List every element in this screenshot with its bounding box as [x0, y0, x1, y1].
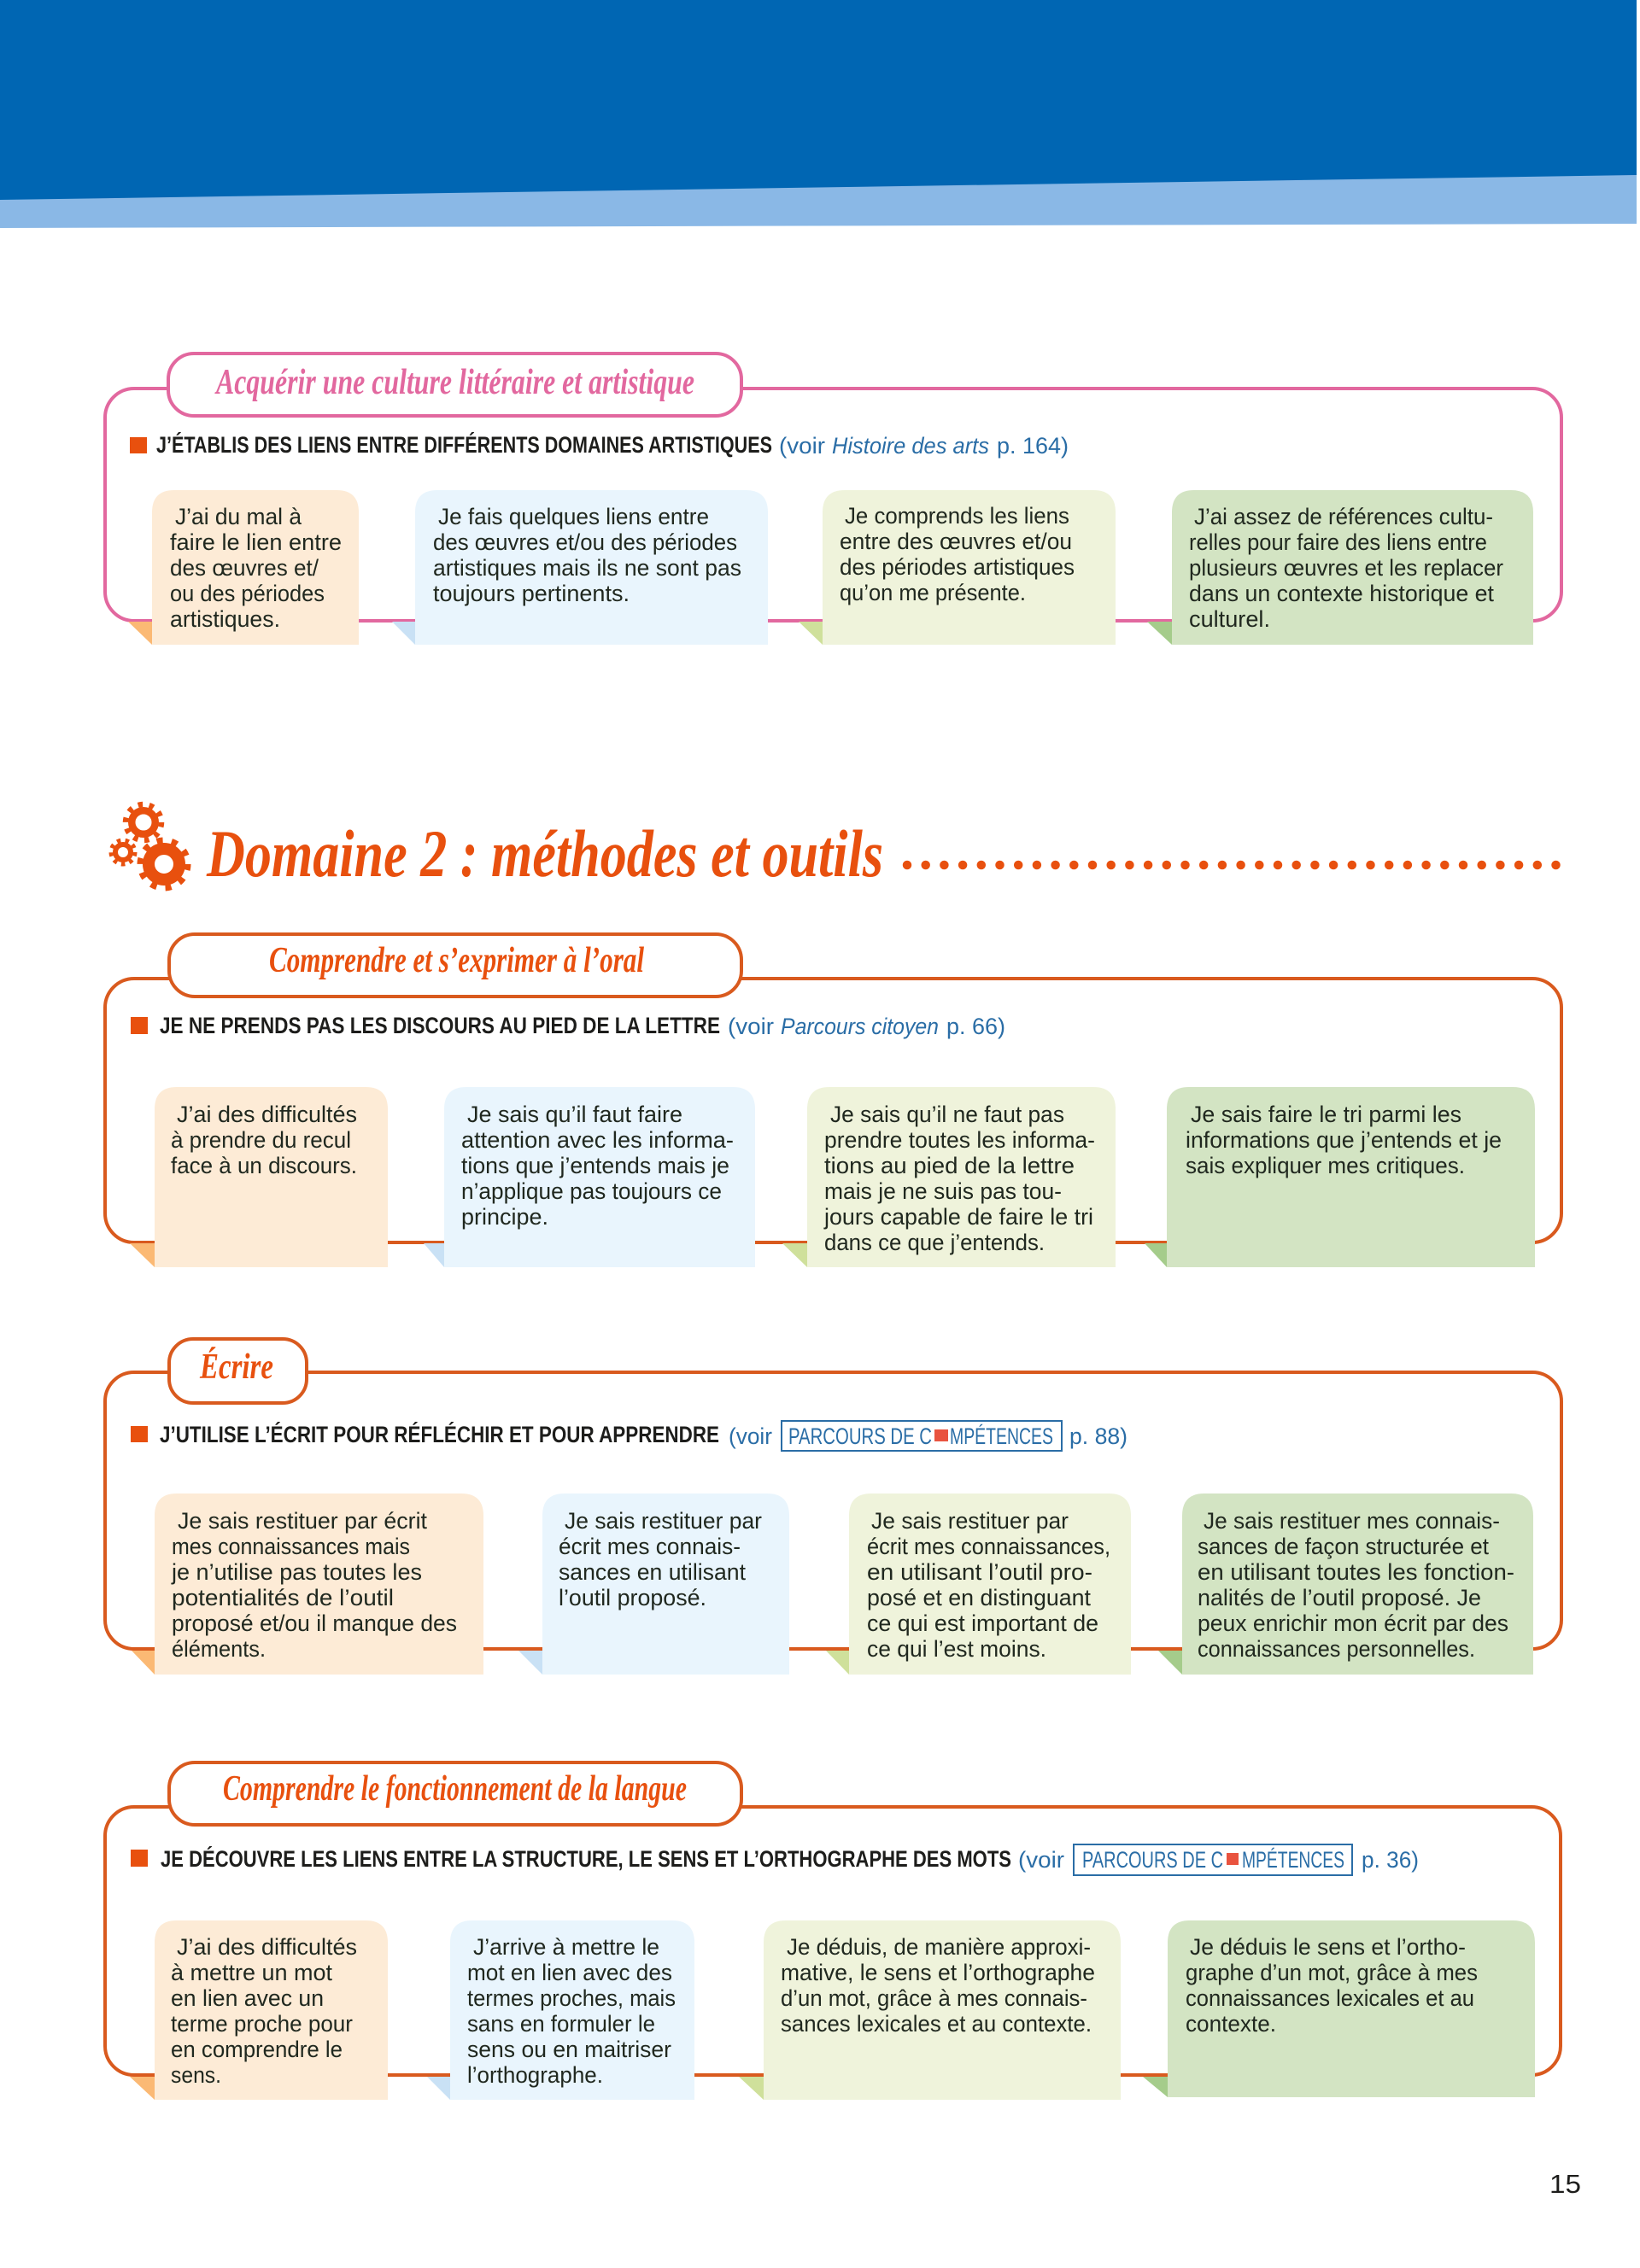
card: level 3: des périodes artistiques: [840, 554, 1075, 580]
title pill: [169, 934, 741, 997]
card: level 1: [132, 1493, 483, 1675]
skill heading: [131, 1421, 1128, 1451]
card: level 2: mot en lien avec des: [467, 1960, 672, 1985]
card: level 2: sances en utilisant: [559, 1559, 746, 1585]
card: level 2: [392, 490, 768, 645]
skill heading: p. 88): [1069, 1423, 1128, 1449]
card: level 2: sans en formuler le: [467, 2011, 655, 2037]
card: level 1: J’ai du mal à: [175, 504, 302, 529]
card: level 1: en comprendre le: [171, 2037, 343, 2062]
card: level 4: informations que j’entends et je: [1186, 1127, 1502, 1153]
card: level 3: tions au pied de la lettre: [824, 1153, 1075, 1178]
card: level 1: J’ai des difficultés: [177, 1934, 357, 1960]
card: level 3: posé et en distinguant: [867, 1585, 1091, 1610]
card: level 1: [130, 1920, 388, 2100]
card: level 3: en utilisant l’outil pro-: [867, 1559, 1092, 1585]
card: level 3: jours capable de faire le tri: [823, 1204, 1093, 1230]
skill heading: Histoire des arts: [832, 433, 989, 459]
panel: comprendre et s'exprimer à l'oral: [105, 934, 1561, 1267]
card: level 2: Je sais restituer par: [565, 1508, 762, 1534]
card: level 1: Je sais restituer par écrit: [178, 1508, 427, 1534]
card: level 1: terme proche pour: [171, 2011, 353, 2037]
card: level 4: plusieurs œuvres et les replacer: [1189, 555, 1503, 581]
card: level 4: J’ai assez de références cultu-: [1194, 504, 1493, 529]
icon: gears: [111, 804, 188, 888]
card: level 4: Je sais restituer mes connais-: [1204, 1508, 1500, 1534]
card: level 4: peux enrichir mon écrit par des: [1198, 1610, 1508, 1636]
card: level 1: à mettre un mot: [171, 1960, 332, 1985]
skill heading: [131, 1844, 1419, 1875]
title pill: Écrire: [199, 1347, 273, 1387]
title pill: Comprendre et s’exprimer à l’oral: [269, 941, 644, 980]
card: level 4: graphe d’un mot, grâce à mes: [1186, 1960, 1478, 1985]
panel: fonctionnement de la langue: [105, 1762, 1561, 2100]
card: level 4: contexte.: [1186, 2011, 1276, 2037]
card: level 2: [427, 1920, 694, 2100]
card: level 2: [424, 1087, 755, 1267]
card: level 1: des œuvres et/: [170, 555, 319, 581]
card: level 3: qu’on me présente.: [840, 580, 1026, 605]
skill heading: PARCOURS DE C: [1082, 1847, 1223, 1873]
card: level 4: connaissances lexicales et au: [1186, 1985, 1474, 2011]
title pill: Acquérir une culture littéraire et artistique: [214, 363, 694, 402]
panel frame: [105, 979, 1561, 1242]
skill heading: (voir: [1018, 1847, 1064, 1873]
card: level 2: l’orthographe.: [467, 2062, 603, 2088]
card: level 4: dans un contexte historique et: [1189, 581, 1494, 606]
card: level 4: [1158, 1493, 1533, 1675]
card: level 4: sais expliquer mes critiques.: [1186, 1153, 1465, 1178]
skill heading: MPÉTENCES: [950, 1423, 1053, 1449]
card: level 3: entre des œuvres et/ou: [840, 529, 1072, 554]
dotted leader: [907, 861, 1565, 869]
card: level 4: culturel.: [1189, 606, 1270, 632]
card: level 3: prendre toutes les informa-: [824, 1127, 1095, 1153]
title pill: [169, 1339, 307, 1403]
skill heading: p. 66): [946, 1014, 1005, 1039]
card: level 3: Je comprends les liens: [845, 503, 1069, 529]
card: level 2: toujours pertinents.: [433, 581, 630, 606]
card: level 2: sens ou en maitriser: [467, 2037, 671, 2062]
card: level 3: [826, 1493, 1131, 1675]
card: level 2: Je fais quelques liens entre: [438, 504, 709, 529]
card: level 1: en lien avec un: [171, 1985, 324, 2011]
card: level 4: nalités de l’outil proposé. Je: [1198, 1585, 1481, 1610]
card: level 4: Je sais faire le tri parmi les: [1191, 1102, 1461, 1127]
card: level 3: [782, 1087, 1116, 1267]
card: level 2: Je sais qu’il faut faire: [467, 1102, 682, 1127]
card: level 3: d’un mot, grâce à mes connais-: [781, 1985, 1087, 2011]
skill heading: (voir: [779, 433, 825, 459]
card: level 3: écrit mes connaissances,: [867, 1534, 1110, 1559]
card: level 2: n’applique pas toujours ce: [461, 1178, 722, 1204]
card: level 1: mes connaissances mais: [172, 1534, 410, 1559]
card: level 3: Je déduis, de manière approxi-: [787, 1934, 1091, 1960]
title pill: Comprendre le fonctionnement de la langue: [223, 1769, 687, 1809]
skill heading: PARCOURS DE C: [788, 1423, 932, 1449]
card: level 4: Je déduis le sens et l’ortho-: [1190, 1934, 1466, 1960]
card: level 1: éléments.: [172, 1636, 266, 1662]
card: level 1: potentialités de l’outil: [172, 1585, 394, 1610]
card: level 3: dans ce que j’entends.: [824, 1230, 1045, 1255]
card: level 1: [130, 1087, 388, 1267]
card: level 1: à prendre du recul: [171, 1127, 351, 1153]
skill heading: J’UTILISE L’ÉCRIT POUR RÉFLÉCHIR ET POUR APPRENDRE: [160, 1421, 719, 1447]
card: level 2: attention avec les informa-: [461, 1127, 734, 1153]
card: level 3: mais je ne suis pas tou-: [824, 1178, 1062, 1204]
card: level 1: face à un discours.: [171, 1153, 357, 1178]
card: level 1: je n’utilise pas toutes les: [171, 1559, 422, 1585]
card: level 2: principe.: [461, 1204, 548, 1230]
skill heading: JE NE PRENDS PAS LES DISCOURS AU PIED DE LA LETTRE: [160, 1013, 720, 1038]
card: level 2: des œuvres et/ou des périodes: [433, 529, 737, 555]
card: level 4: sances de façon structurée et: [1198, 1534, 1489, 1559]
panel frame: [105, 1372, 1561, 1649]
header band: [0, 0, 1637, 228]
page number: 15: [1549, 2169, 1581, 2199]
card: level 3: [799, 490, 1116, 645]
card: level 2: tions que j’entends mais je: [461, 1153, 729, 1178]
card: level 2: [518, 1493, 789, 1675]
card: level 1: proposé et/ou il manque des: [172, 1610, 457, 1636]
card: level 1: ou des périodes: [170, 581, 325, 606]
card: level 1: sens.: [171, 2062, 221, 2088]
card: level 4: [1147, 490, 1533, 645]
panel: écrire: [105, 1339, 1561, 1675]
skill heading: Parcours citoyen: [781, 1014, 939, 1039]
skill heading: (voir: [729, 1423, 772, 1449]
card: level 1: artistiques.: [170, 606, 280, 632]
card: level 4: connaissances personnelles.: [1198, 1636, 1475, 1662]
card: level 3: Je sais qu’il ne faut pas: [830, 1102, 1064, 1127]
skill heading: (voir: [728, 1014, 774, 1039]
card: level 4: [1145, 1087, 1535, 1267]
card: level 2: écrit mes connais-: [559, 1534, 741, 1559]
domain title: Domaine 2 : méthodes et outils: [206, 816, 883, 891]
skill heading: MPÉTENCES: [1242, 1847, 1344, 1873]
title pill: [168, 354, 741, 416]
card: level 2: l’outil proposé.: [559, 1585, 706, 1610]
panel frame: [105, 1807, 1561, 2075]
title pill: [169, 1762, 741, 1825]
card: level 4: en utilisant toutes les fonction-: [1198, 1559, 1514, 1585]
card: level 4: [1143, 1920, 1535, 2097]
card: level 3: ce qui l’est moins.: [867, 1636, 1046, 1662]
skill heading: p. 36): [1362, 1847, 1419, 1873]
card: level 4: relles pour faire des liens entre: [1189, 529, 1487, 555]
skill heading: p. 164): [997, 433, 1069, 459]
card: level 3: [739, 1920, 1121, 2100]
card: level 3: ce qui est important de: [867, 1610, 1098, 1636]
card: level 3: mative, le sens et l’orthographe: [781, 1960, 1095, 1985]
card: level 1: faire le lien entre: [170, 529, 342, 555]
skill heading: J’ÉTABLIS DES LIENS ENTRE DIFFÉRENTS DOMAINES ARTISTIQUES: [156, 431, 772, 458]
card: level 2: J’arrive à mettre le: [473, 1934, 659, 1960]
card: level 2: termes proches, mais: [467, 1985, 676, 2011]
card: level 3: sances lexicales et au contexte.: [781, 2011, 1092, 2037]
panel frame: [105, 389, 1561, 621]
card: level 1: [128, 490, 359, 645]
panel: culture littéraire et artistique: [105, 354, 1561, 645]
card: level 1: J’ai des difficultés: [177, 1102, 357, 1127]
skill heading: JE DÉCOUVRE LES LIENS ENTRE LA STRUCTURE, LE SENS ET L’ORTHOGRAPHE DES MOTS: [161, 1845, 1011, 1872]
card: level 2: artistiques mais ils ne sont pas: [433, 555, 741, 581]
card: level 3: Je sais restituer par: [871, 1508, 1069, 1534]
